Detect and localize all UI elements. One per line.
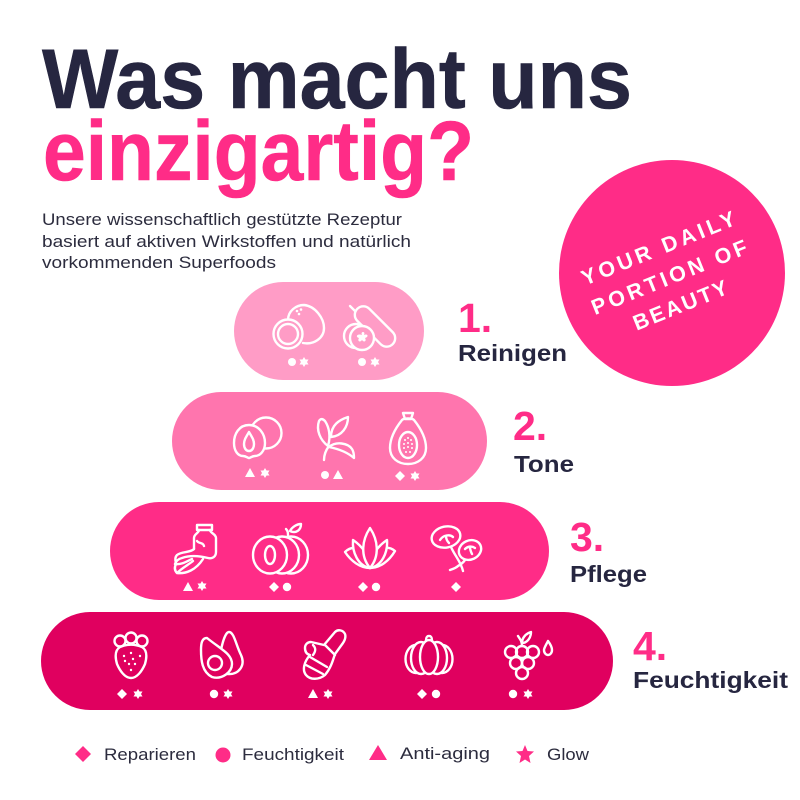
legend item: Anti-aging xyxy=(369,744,490,763)
legend item: Reparieren xyxy=(75,745,196,764)
rating marks: triangle star, diamond circle, diamond circle, diamond xyxy=(183,581,461,592)
legend item: Glow: Glow xyxy=(547,745,590,764)
step 2 label: Tone xyxy=(514,451,574,477)
intro text: basiert auf aktiven Wirkstoffen und natürlich xyxy=(42,233,411,251)
step 4 label xyxy=(633,623,788,693)
legend item: Anti-aging: Anti-aging xyxy=(400,744,490,763)
step 3 label xyxy=(570,514,647,587)
step 3 label: Pflege xyxy=(570,561,647,587)
icon: mushrooms xyxy=(430,524,484,571)
rating marks: circle and star xyxy=(288,357,380,367)
icon: cucumber xyxy=(344,303,399,350)
legend xyxy=(75,744,590,764)
panel: step 2 Tone xyxy=(172,392,487,490)
rating marks: triangle star, circle triangle, diamond star xyxy=(245,468,420,481)
icon: papaya xyxy=(390,413,426,464)
legend item: Glow xyxy=(516,745,590,764)
intro text xyxy=(42,211,411,272)
icon: grapes xyxy=(505,632,552,679)
icon: avocado xyxy=(201,632,243,678)
step 4 label: 4. xyxy=(633,623,667,669)
step 3 label: 3. xyxy=(570,514,604,560)
icon: ginseng xyxy=(175,525,216,573)
badge: your daily portion of beauty: BEAUTY xyxy=(630,276,731,335)
panel: step 1 Reinigen xyxy=(234,282,424,380)
intro text: vorkommenden Superfoods xyxy=(42,254,276,272)
icon: aloe xyxy=(345,528,395,568)
step 1 label xyxy=(458,295,567,366)
badge: your daily portion of beauty: YOUR DAILY xyxy=(578,207,739,290)
panel: step 4 Feuchtigkeit xyxy=(41,612,613,710)
icon: ginger xyxy=(304,630,345,679)
title: einzigartig? xyxy=(43,104,474,198)
step 2 label xyxy=(513,403,574,477)
step 4 label: Feuchtigkeit xyxy=(633,667,788,693)
intro text: Unsere wissenschaftlich gestützte Rezeptur xyxy=(42,211,403,229)
legend item: Feuchtigkeit: Feuchtigkeit xyxy=(242,745,344,764)
icon: coconut xyxy=(274,305,324,348)
step 1 label: Reinigen xyxy=(458,340,567,366)
icon: pumpkin xyxy=(406,636,452,674)
icon: strawberry xyxy=(114,632,148,678)
badge: your daily portion of beauty: PORTION OF xyxy=(588,235,751,320)
panel: step 3 Pflege xyxy=(110,502,549,600)
title: Was macht uns xyxy=(42,32,632,126)
badge: your daily portion of beauty xyxy=(559,160,785,386)
icon: peach xyxy=(253,524,308,574)
step 1 label: 1. xyxy=(458,295,492,341)
icon: plum xyxy=(234,418,282,458)
rating marks: diamond star, circle star, triangle star, diamond circle, circle star xyxy=(117,689,532,699)
legend item: Reparieren: Reparieren xyxy=(104,745,196,764)
step 2 label: 2. xyxy=(513,403,547,449)
title xyxy=(42,32,632,198)
icon: leaves xyxy=(318,417,354,460)
